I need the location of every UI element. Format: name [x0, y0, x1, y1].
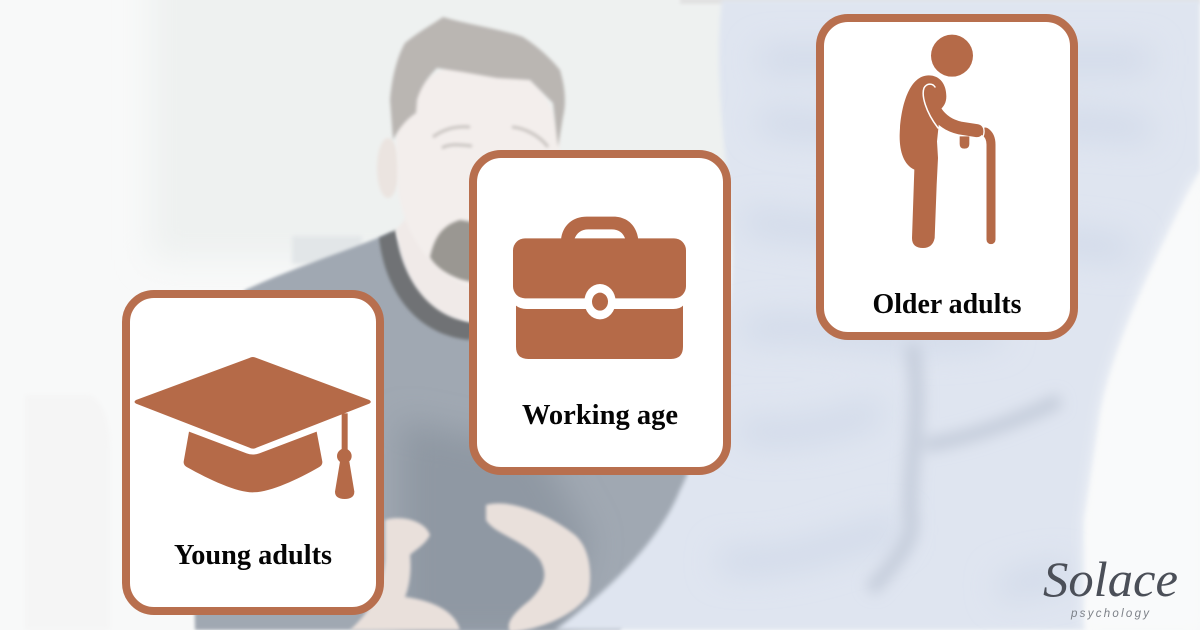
logo: Solace psychology: Solace	[1043, 551, 1178, 607]
man's brow and eye	[433, 127, 548, 148]
other person's sweater	[555, 0, 1200, 630]
man's hands	[350, 518, 460, 630]
man's shirt	[190, 232, 690, 630]
card: working age	[473, 154, 727, 471]
man's hair	[390, 17, 565, 147]
card: older adults	[820, 18, 1074, 336]
label: older adults: Older adults	[872, 288, 1022, 320]
man's head	[396, 62, 560, 288]
label: young adults: Young adults	[174, 539, 332, 571]
man's ear	[377, 138, 399, 198]
icon: graduation cap	[134, 357, 371, 499]
icon: briefcase	[513, 217, 686, 359]
man's goatee	[430, 220, 472, 282]
label: working age: Working age	[522, 399, 678, 431]
shirt collar	[379, 230, 475, 340]
logo: Solace psychology: psychology	[1070, 608, 1150, 620]
icon: elderly person with cane	[900, 35, 991, 248]
neck	[396, 190, 480, 322]
card: young adults	[126, 294, 380, 611]
white figure at right	[1085, 170, 1200, 630]
